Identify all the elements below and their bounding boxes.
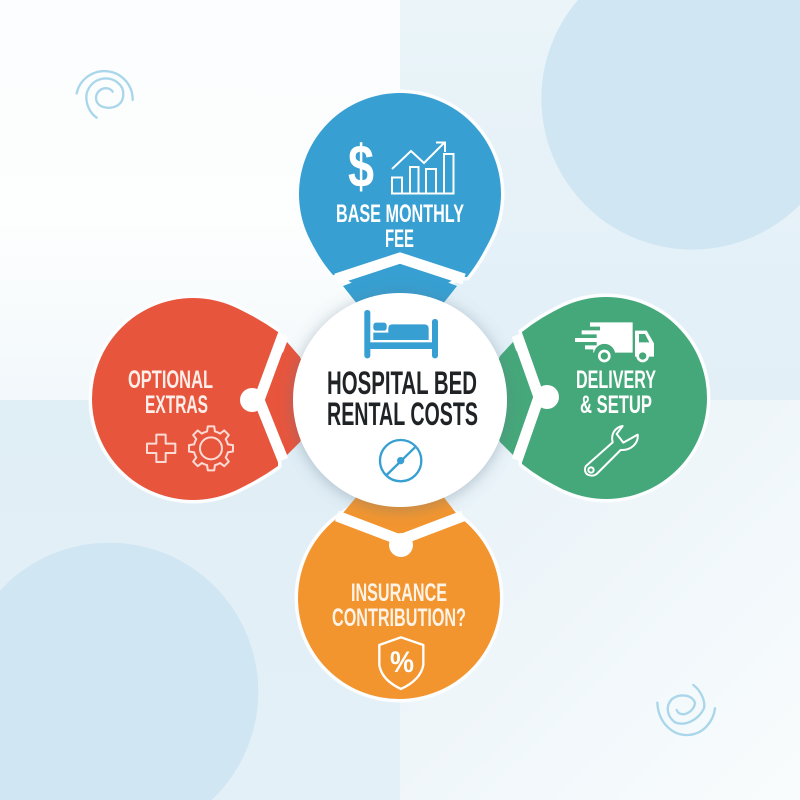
title: RENTAL COSTS (327, 396, 478, 432)
label: delivery and setup: & SETUP (580, 391, 652, 419)
icon: percent shield: % (390, 646, 414, 679)
title: HOSPITAL BED (327, 365, 477, 401)
label: insurance contribution: INSURANCE (351, 579, 447, 607)
icon: delivery truck (575, 322, 654, 361)
label: delivery and setup (576, 366, 656, 419)
label: insurance contribution: CONTRIBUTION? (332, 604, 466, 632)
title (327, 365, 478, 432)
icon: dial (380, 440, 421, 481)
panel: insurance contribution (294, 494, 504, 702)
label: optional extras: OPTIONAL (128, 366, 213, 394)
connector chevron: bottom (337, 516, 463, 557)
panel: center hub (293, 293, 507, 507)
panel: delivery and setup (490, 294, 710, 502)
icon: percent shield (379, 637, 423, 689)
icon: gear (189, 426, 233, 470)
panel: optional extras (88, 294, 310, 504)
icon: wrench (585, 426, 638, 476)
icon: hospital bed (364, 310, 438, 358)
connector chevron: right (517, 335, 559, 460)
connector chevron: left (240, 335, 283, 460)
label: optional extras (128, 366, 213, 419)
label: delivery and setup: DELIVERY (576, 366, 656, 394)
label: optional extras: EXTRAS (145, 391, 208, 419)
label: base monthly fee: FEE (385, 225, 414, 253)
label: base monthly fee: BASE MONTHLY (336, 200, 464, 228)
icon: dollar sign: $ (348, 133, 374, 200)
connector chevron: top (336, 258, 464, 279)
label: insurance contribution (332, 579, 466, 632)
label: base monthly fee (336, 200, 464, 253)
panel: base monthly fee (296, 90, 504, 305)
icon: bar chart with arrow (392, 142, 454, 194)
icon: spiral top left (77, 71, 133, 118)
icon: plus (147, 435, 175, 462)
icon: spiral bottom right (657, 685, 715, 735)
